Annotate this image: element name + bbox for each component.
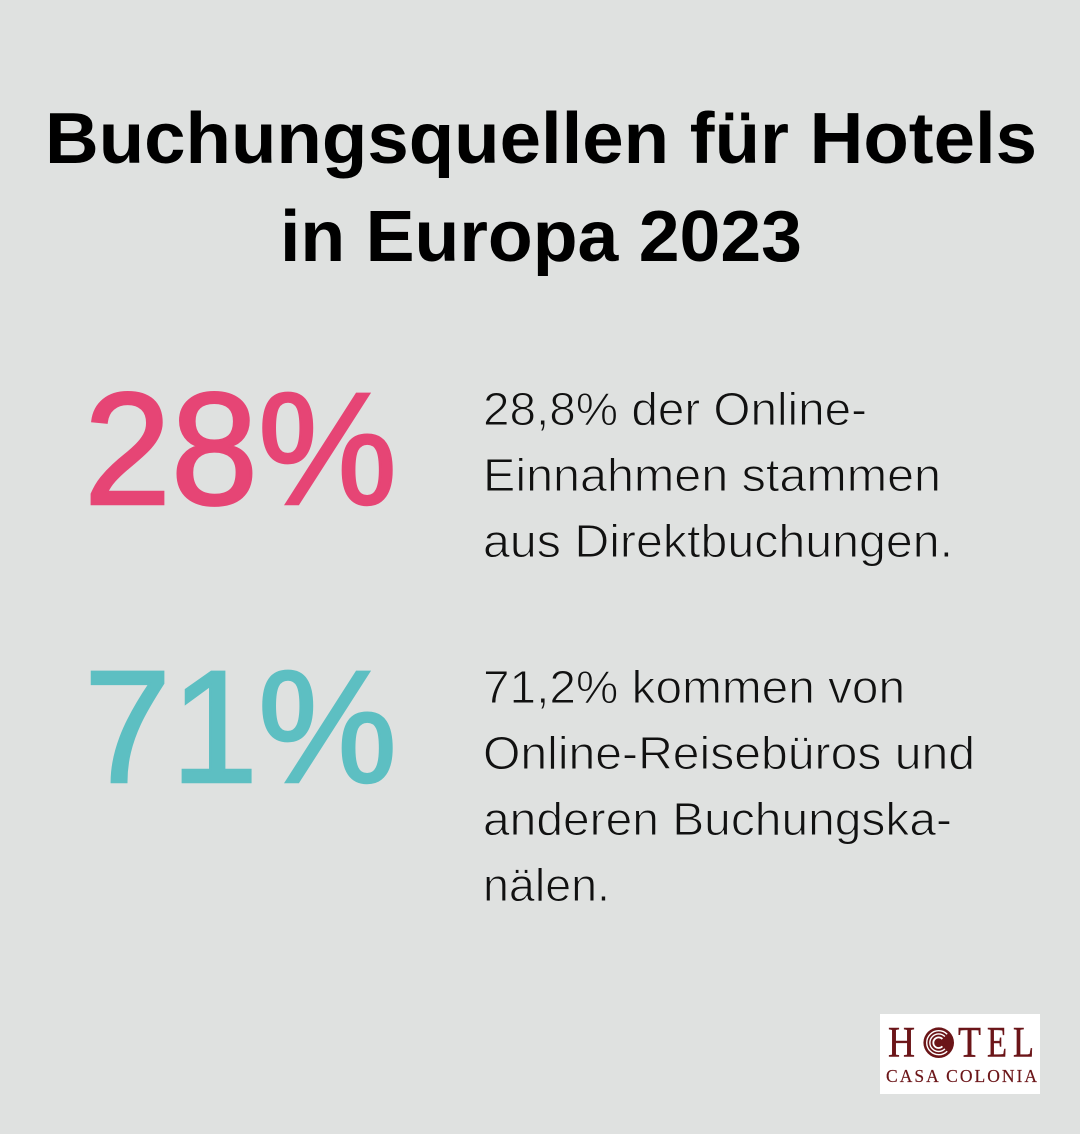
- title: in Europa 2023: [280, 197, 802, 277]
- text block: direct bookings: Einnahmen stammen: [483, 449, 941, 501]
- title: [45, 99, 1037, 277]
- text block: direct bookings: [483, 383, 953, 567]
- statistic: 71%: 71%: [84, 637, 397, 816]
- logo: Hotel Casa Colonia: T: [958, 1020, 981, 1066]
- text block: online travel agencies: [483, 661, 975, 911]
- logo: Hotel Casa Colonia: CASA COLONIA: [886, 1066, 1037, 1086]
- icon: concentric circle letter O: [923, 1027, 954, 1058]
- logo: Hotel Casa Colonia: H: [888, 1020, 915, 1066]
- logo: Hotel Casa Colonia: E: [987, 1020, 1007, 1066]
- statistic: 28%: 28%: [84, 359, 397, 538]
- text block: online travel agencies: nälen.: [483, 859, 610, 911]
- logo: Hotel Casa Colonia: L: [1013, 1020, 1034, 1066]
- text block: direct bookings: aus Direktbuchungen.: [483, 515, 953, 567]
- text block: online travel agencies: anderen Buchungska-: [483, 793, 952, 845]
- text block: online travel agencies: 71,2% kommen von: [483, 661, 905, 713]
- text block: direct bookings: 28,8% der Online-: [483, 383, 867, 435]
- text block: online travel agencies: Online-Reisebüros und: [483, 727, 975, 779]
- logo: Hotel Casa Colonia: [880, 1014, 1040, 1094]
- title: Buchungsquellen für Hotels: [45, 99, 1037, 179]
